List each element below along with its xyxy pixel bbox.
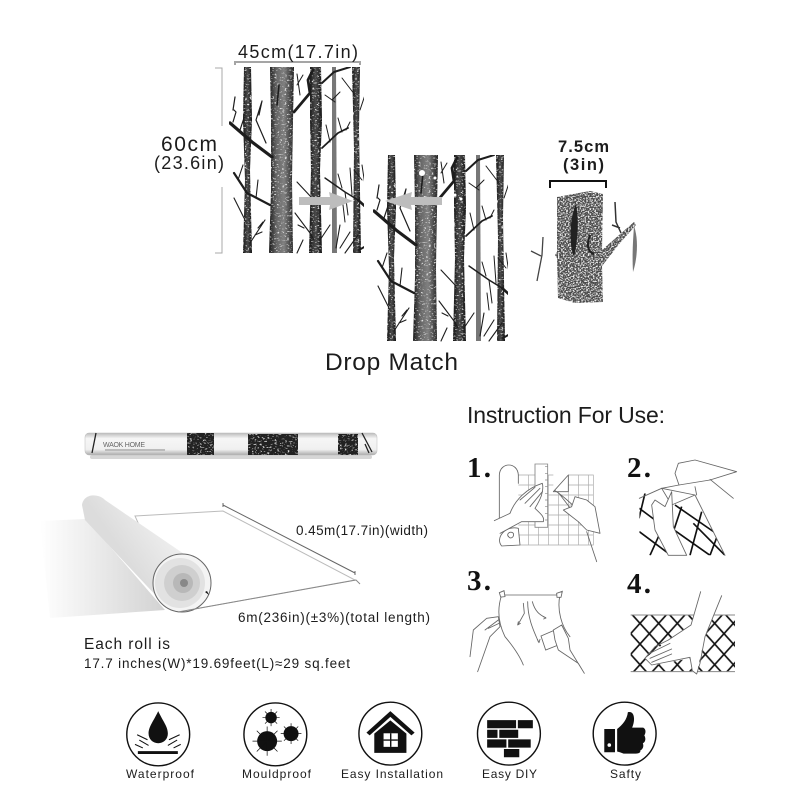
label: roll width: 0.45m(17.7in)(width) [296,523,428,538]
product roll: packaged tube: WAOK HOME [103,442,145,449]
illustration: step 3 smooth with squeegee [470,591,584,673]
illustration: step 2 peel backing [639,460,737,555]
badge: easy installation: Easy Installation [341,767,443,781]
text: roll size: 17.7 inches(W)*19.69feet(L)≈29 sq.feet [84,656,350,671]
dimension: trunk width [550,138,609,188]
width dimension line [223,503,355,575]
badge: waterproof [126,703,195,781]
dimension: tile height: (23.6in) [154,153,224,173]
badge: easy installation [341,702,443,781]
text: roll size [84,636,350,671]
roll tube [82,495,187,600]
wallpaper tile 1: birch trees [230,67,368,253]
floor shadow [40,519,165,618]
unrolled wallpaper sheet [135,511,355,612]
label: roll length: 6m(236in)(±3%)(total length) [238,610,430,625]
dimension: trunk width: (3in) [563,156,604,174]
badge: mouldproof: Mouldproof [242,767,312,781]
dimension: tile width: 45cm(17.7in) [238,42,358,62]
white knots on tile 2 [419,170,462,200]
step number 3: 3. [467,565,491,597]
wallpaper tile 2: birch trees dropped [374,155,512,341]
product roll: packaged tube [85,433,377,459]
badge: mouldproof [242,703,312,781]
badge: easy DIY: Easy DIY [482,767,537,781]
step number 1: 1. [467,452,491,484]
heading: instructions: Instruction For Use: [467,402,665,428]
dimension: tile height [154,68,224,253]
text: roll size: Each roll is [84,636,170,653]
step number 4: 4. [627,568,651,600]
arrow: left match [385,192,442,210]
badge: safety thumbs up [593,702,656,781]
step number 2: 2. [627,452,651,484]
dimension: tile height: 60cm [161,133,217,156]
badge: waterproof: Waterproof [126,767,195,781]
badge: safety thumbs up: Safty [610,767,641,781]
heading: drop match: Drop Match [325,349,458,376]
length edge line [178,580,360,612]
dimension: trunk width: 7.5cm [558,138,609,156]
roll end spiral [153,554,211,612]
illustration: step 4 smooth lattice wallpaper [631,592,735,674]
arrow: right match [299,192,353,210]
trunk close-up [531,191,637,303]
badge: easy DIY [477,702,540,781]
illustration: step 1 measure and cut [494,464,600,562]
